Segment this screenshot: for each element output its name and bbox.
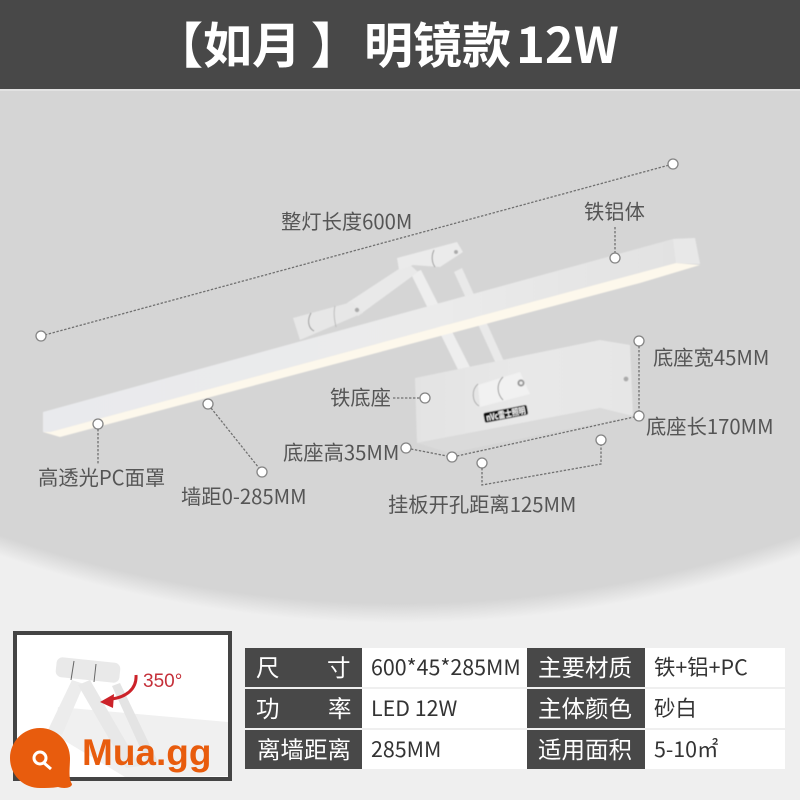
row: size / material: 主要材质 — [538, 649, 632, 683]
row: size / material — [245, 648, 785, 687]
callout: iron aluminium body: 铁铝体 — [584, 195, 645, 225]
callout: base width — [634, 336, 769, 411]
callout: wall distance: 墙距0-285MM — [181, 480, 307, 510]
lamp: swing arms behind the bar — [293, 242, 511, 390]
callout: PC cover — [38, 419, 165, 491]
callout: iron base — [330, 381, 430, 411]
screw — [624, 377, 628, 381]
dimension line: overall length — [36, 159, 678, 341]
spec table — [245, 648, 785, 769]
row: power / colour: 砂白 — [654, 692, 697, 723]
diagonal arm — [347, 263, 418, 316]
long arms — [411, 270, 480, 390]
watermark text: Mua.gg — [82, 732, 211, 773]
thumbnail: rotation detail — [15, 633, 230, 779]
row: power / colour: 率 — [328, 690, 352, 724]
row: wall distance / area: 285MM — [371, 733, 441, 764]
callout: base width: 底座宽45MM — [653, 341, 769, 371]
base rollers — [478, 372, 530, 407]
callout: iron base: 铁底座 — [330, 381, 391, 411]
callout: mounting hole distance — [388, 435, 606, 518]
rear bracket — [293, 302, 363, 340]
title: 12W — [516, 7, 619, 78]
callout: mounting hole distance: 挂板开孔距离125MM — [388, 488, 576, 518]
upper bracket — [397, 242, 463, 270]
label: overall length: 整灯长度600M — [281, 205, 412, 235]
row: power / colour — [245, 689, 785, 728]
callout: base length and height — [283, 410, 774, 466]
title: 【如月 — [154, 7, 301, 78]
callout: base length and height: 底座高35MM — [283, 436, 399, 466]
row: power / colour: 功 — [256, 690, 280, 724]
row: power / colour: LED 12W — [371, 692, 457, 723]
callout: wall distance — [181, 399, 307, 510]
magnifier icon — [34, 752, 51, 769]
watermark: Mua.gg — [10, 728, 211, 788]
row: wall distance / area: 5-10㎡ — [654, 733, 718, 764]
title bar — [0, 0, 800, 91]
lamp: wall base — [415, 340, 633, 453]
callout: iron aluminium body — [584, 195, 645, 263]
title: 】 — [311, 7, 360, 78]
row: wall distance / area: 离墙距离 — [257, 731, 351, 765]
rotation label: 350° — [143, 671, 182, 692]
row: wall distance / area: 适用面积 — [538, 731, 632, 765]
light strip — [43, 263, 700, 437]
lamp arm detail — [48, 657, 228, 777]
row: size / material: 寸 — [327, 649, 350, 683]
title: 明镜款 — [364, 7, 511, 78]
row: power / colour: 主体颜色 — [538, 690, 632, 724]
row: wall distance / area — [245, 730, 785, 769]
rotation arrow — [100, 675, 136, 708]
callout: base length and height: 底座长170MM — [646, 410, 774, 440]
row: size / material: 600*45*285MM — [371, 651, 521, 682]
callout: PC cover: 高透光PC面罩 — [38, 461, 165, 491]
lamp: light bar — [43, 238, 700, 437]
row: size / material: 尺 — [256, 649, 280, 683]
row: size / material: 铁+铝+PC — [654, 651, 748, 682]
watermark bubble — [10, 728, 72, 788]
brand logo: nVc雷士照明 — [485, 404, 527, 424]
